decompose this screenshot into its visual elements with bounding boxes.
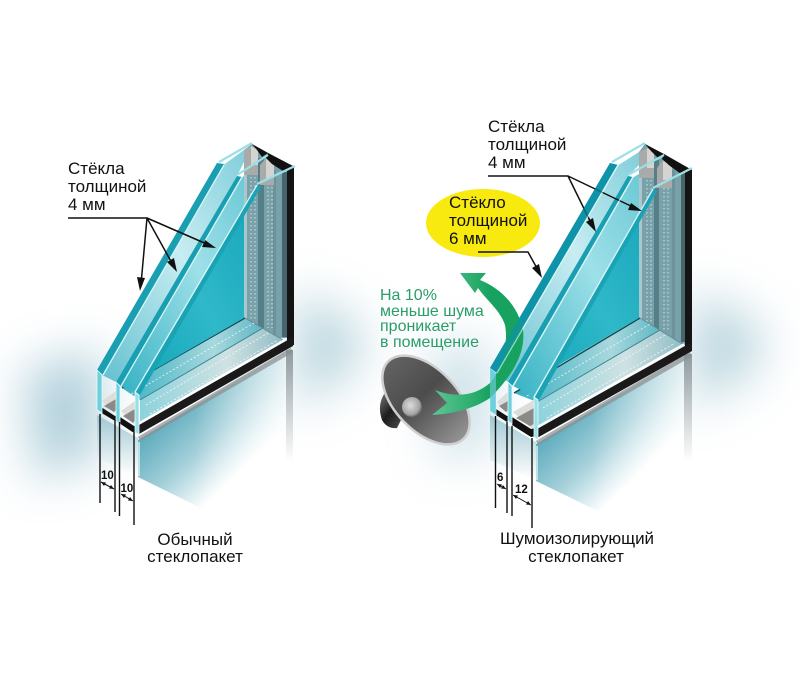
glass edges over arrow: [490, 163, 633, 415]
black frame: [252, 144, 295, 345]
pane 2 edge: [116, 176, 242, 386]
caption: soundproof: [500, 529, 654, 566]
gap between panes 2 and 3: [513, 174, 639, 397]
green note text: [380, 287, 484, 351]
label: 6 mm pane: Стёкло: [449, 193, 506, 212]
pane 3 edge: [535, 189, 657, 400]
pane cut faces: [97, 370, 102, 413]
inner glass area: [139, 207, 244, 395]
green curved arrow: [432, 273, 523, 415]
window: ordinary double glazing: [97, 143, 295, 435]
gap between panes 2 and 3: [120, 176, 244, 392]
yellow ellipse highlight: [426, 189, 540, 257]
caption: ordinary: Обычный: [157, 530, 233, 549]
gap between panes 1 and 2: [102, 150, 244, 382]
label: left panes: толщиной: [68, 177, 146, 196]
cone: [366, 340, 486, 460]
label: 6 mm pane: [449, 193, 542, 278]
label: left panes: 4 мм: [68, 195, 106, 214]
label: right panes: Стёкла: [488, 117, 545, 136]
gap between panes 1 and 2: [496, 152, 639, 382]
reflection: left window: [97, 350, 293, 510]
green note text: меньше шума: [380, 303, 484, 320]
caption: ordinary: [147, 530, 243, 566]
dimensions: left: 10: [120, 483, 133, 495]
green note text: проникает: [380, 318, 457, 335]
speaker icon: [366, 340, 486, 460]
leader arrows: [68, 218, 216, 291]
dimensions: left: [100, 414, 134, 525]
pane top edges: [219, 143, 295, 184]
dimensions: right: [496, 416, 532, 528]
window: soundproof double glazing: [490, 143, 692, 440]
pane 2 edge: [508, 176, 633, 386]
pane 1 edge: [97, 163, 224, 375]
pane top edges: [612, 143, 692, 188]
label: right panes: 4 мм: [488, 153, 526, 172]
background glow: [25, 290, 760, 480]
dome: [402, 397, 422, 417]
green note text: в помещение: [380, 334, 479, 351]
pane 1 edge, 6 mm: [490, 163, 618, 373]
caption: soundproof: стеклопакет: [528, 547, 624, 566]
label: right panes: толщиной: [488, 135, 566, 154]
spacer ends: [497, 392, 508, 413]
spacer ends: [102, 391, 116, 413]
dimensions: left: 10: [101, 470, 114, 482]
label: right panes: [488, 117, 642, 232]
dimensions: right: 6: [497, 472, 503, 484]
black frame: [645, 144, 692, 351]
caption: soundproof: Шумоизолирующий: [500, 529, 654, 548]
bottom strips: [514, 318, 692, 438]
spacer columns: [244, 144, 294, 338]
pane cut faces: [490, 368, 496, 415]
green note text: На 10%: [380, 287, 437, 304]
label: 6 mm pane: толщиной: [449, 211, 527, 230]
reflection: right window: [490, 354, 692, 514]
spacer columns: [639, 144, 692, 345]
label: left panes: [68, 159, 216, 291]
caption: ordinary: стеклопакет: [147, 547, 243, 566]
leader arrow: [478, 252, 542, 278]
inner glass area: [538, 213, 639, 399]
label: left panes: Стёкла: [68, 159, 125, 178]
leader arrows: [488, 176, 642, 232]
dimensions: right: 12: [515, 484, 528, 496]
label: 6 mm pane: 6 мм: [449, 229, 487, 248]
bottom strips: [122, 318, 293, 434]
pane 3 edge: [136, 185, 261, 395]
magnet: [380, 394, 406, 428]
